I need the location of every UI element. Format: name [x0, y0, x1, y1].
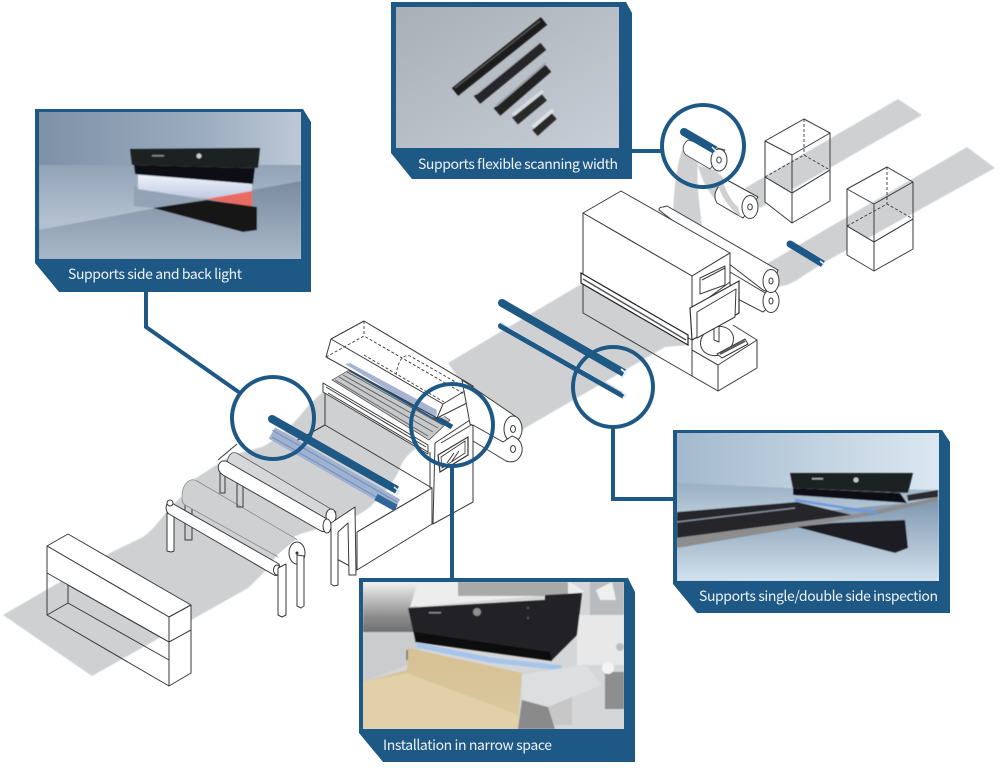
roller stand with tubes	[218, 444, 356, 586]
rear roller and web	[715, 176, 758, 218]
panel: supports flexible scanning width	[391, 2, 632, 179]
front roller with stand	[166, 480, 305, 617]
panel: supports single/double side inspection	[673, 430, 950, 613]
side column with control screen	[433, 418, 473, 524]
photo: sensor with side and back light	[39, 148, 301, 259]
roller inside magnifier top	[680, 128, 727, 171]
caption: Supports flexible scanning width	[418, 154, 618, 174]
rear box two	[847, 167, 913, 271]
panel: installation in narrow space	[359, 578, 635, 762]
photo: five sensors of different lengths	[455, 21, 554, 133]
second machine	[581, 191, 757, 391]
caption: Supports single/double side inspection	[699, 586, 938, 606]
sensor machine with hood	[323, 321, 473, 488]
caption: Supports side and back light	[68, 264, 243, 284]
sensor bars over the table	[268, 415, 399, 509]
photo: sensor in narrow machine gap	[363, 582, 624, 729]
front exit frame	[47, 534, 191, 686]
magnifier circles and leader lines	[146, 105, 744, 580]
long sensor bars between machines	[498, 299, 626, 398]
photo: sensors above and below material	[677, 473, 939, 581]
small sensor bar	[786, 240, 824, 268]
rollers behind first machine	[462, 380, 522, 462]
rear box one	[765, 119, 830, 223]
panel: supports side and back light	[35, 109, 311, 292]
rollers behind second machine	[659, 206, 779, 312]
grey material web	[3, 99, 995, 676]
caption: Installation in narrow space	[383, 735, 552, 755]
inspection table	[285, 425, 432, 570]
